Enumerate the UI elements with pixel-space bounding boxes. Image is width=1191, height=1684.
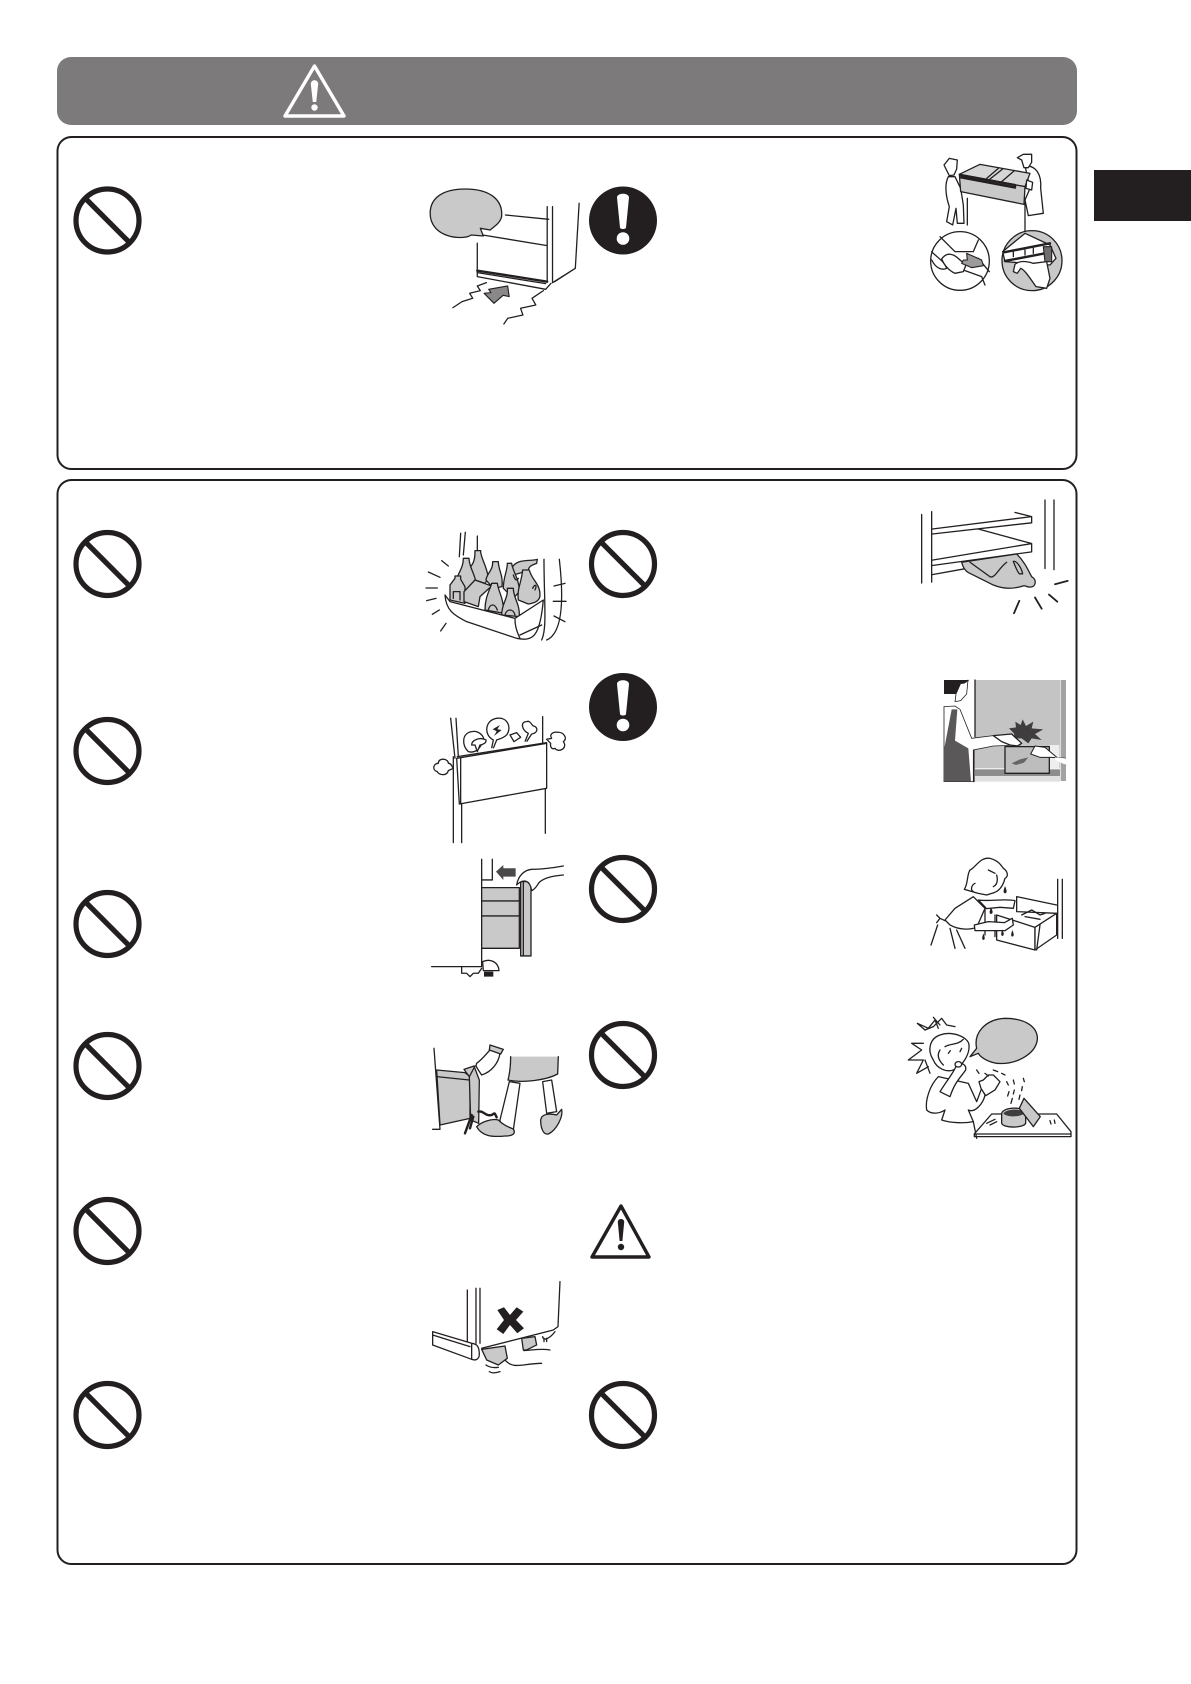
icon: prohibition 10: [592, 1384, 654, 1446]
panel: lower warnings: [58, 480, 1076, 1564]
illustration: fridge drawer and vibration: [430, 189, 579, 324]
illustration: woman smelling spoiled food: [908, 1017, 1071, 1138]
illustration: stepping on cord by drawer: [433, 1045, 562, 1136]
icon: prohibition 2: [76, 720, 139, 782]
side tab: [1094, 170, 1191, 221]
panel: upper warnings: [58, 137, 1076, 469]
icon: prohibition 8: [592, 858, 654, 920]
icon: prohibition 7: [592, 532, 654, 596]
illustration: hand under fridge: [433, 1282, 560, 1373]
banner: warning header: [57, 57, 1077, 125]
icon: prohibition 3: [76, 892, 139, 956]
illustration: person handling broken item in fridge: [944, 680, 1066, 782]
illustration: items on top of door with smoke: [434, 717, 565, 843]
icon: prohibition 9: [592, 1024, 654, 1086]
icon: warning triangle: [592, 1206, 649, 1257]
icon: prohibition 5: [76, 1200, 139, 1262]
illustration: bottle under shelf: [922, 500, 1068, 613]
icon: prohibition: [76, 189, 139, 252]
illustration: overloaded door pocket: [426, 532, 566, 640]
icon: prohibition 4: [76, 1034, 139, 1098]
illustration: woman with wet drawer: [931, 858, 1062, 950]
icon: prohibition 1: [76, 532, 139, 596]
icon: mandatory 2: [589, 673, 657, 741]
icon: mandatory: [589, 186, 657, 254]
illustration: closing drawer: [432, 859, 563, 977]
icon: white warning triangle: [285, 66, 344, 116]
illustration: two workers carrying fridge: [931, 154, 1062, 291]
icon: prohibition 6: [76, 1384, 139, 1446]
